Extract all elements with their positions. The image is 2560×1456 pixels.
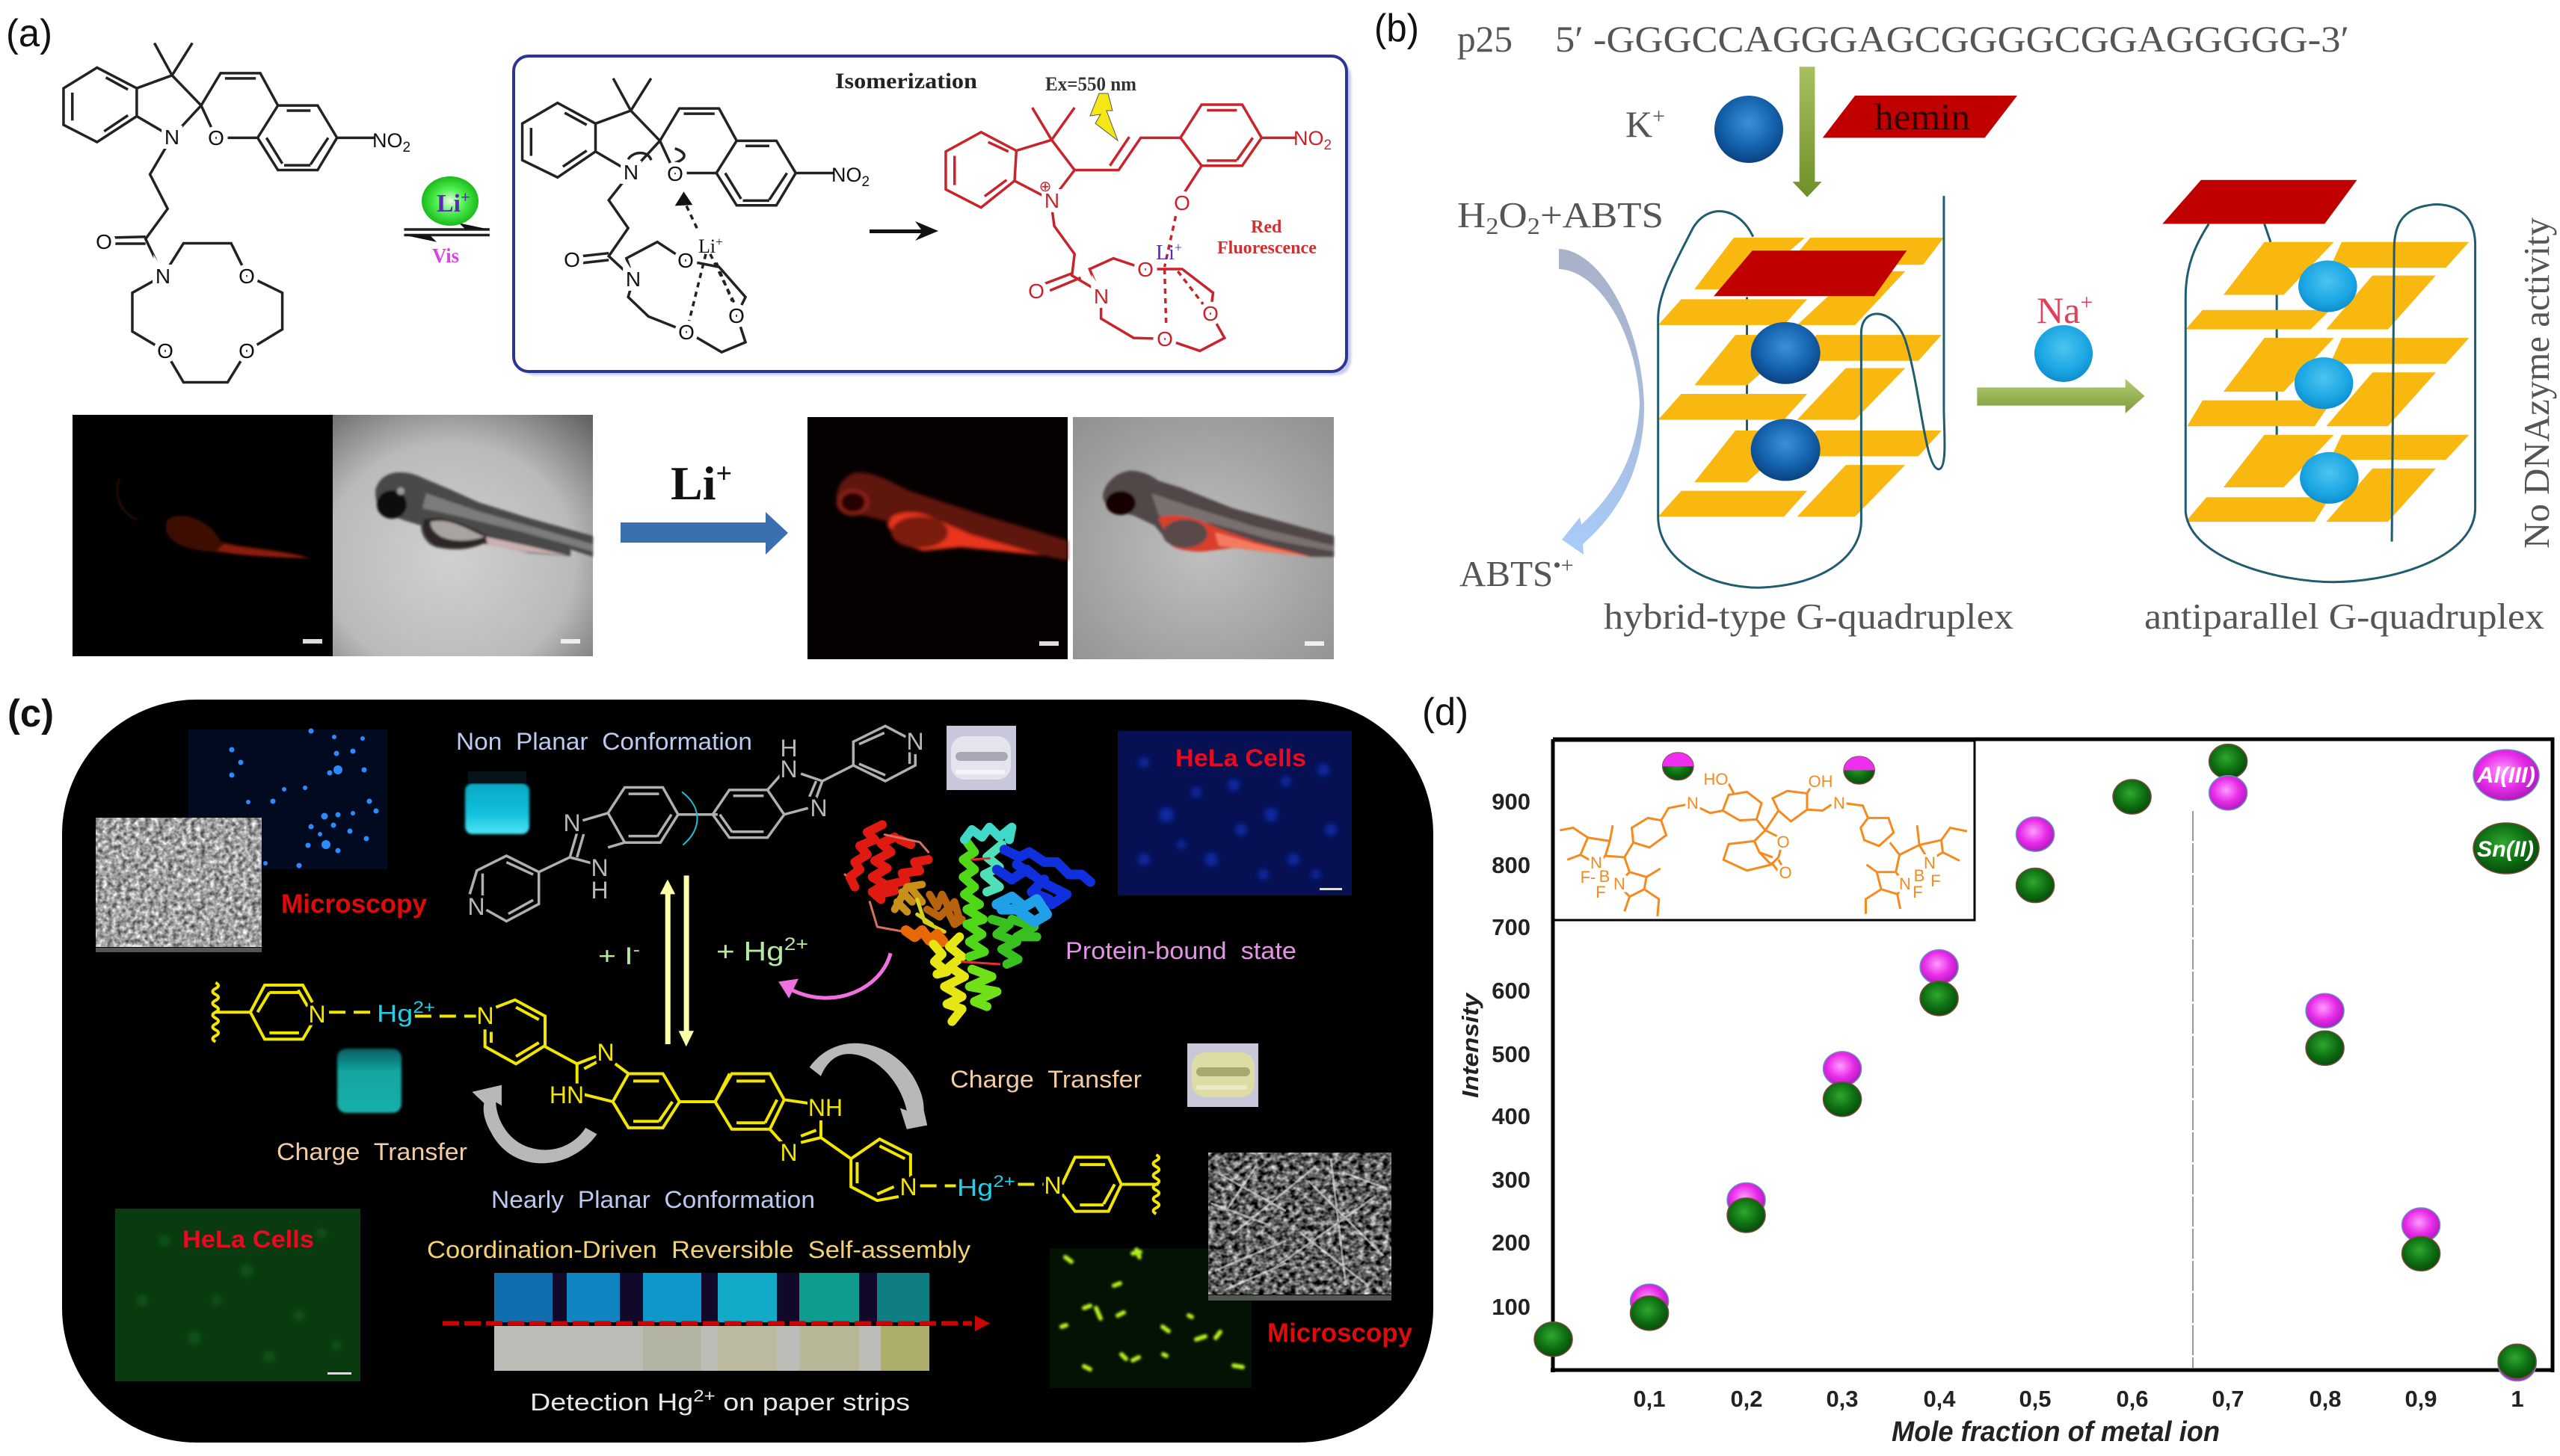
x axis tick labels — [1633, 1386, 2524, 1412]
image: paper strips — [494, 1273, 929, 1371]
molecule: black closed form: N — [626, 268, 641, 291]
arrow: gray left charge transfer — [472, 1085, 597, 1163]
x axis tick labels: 0,8 — [2309, 1386, 2342, 1412]
y axis tick labels: 600 — [1492, 978, 1530, 1004]
text: p25 sequence: p25 — [1457, 18, 1513, 60]
icon: yellow vial — [1187, 1043, 1258, 1107]
inset: BODIPY molecule: HO — [1703, 770, 1729, 789]
diagram: antiparallel G-quadruplex — [2162, 180, 2476, 582]
molecule: gray non planar: N — [591, 854, 609, 881]
inset: BODIPY molecule: N — [1924, 854, 1936, 872]
text: Charge Transfer right: Charge Transfer — [950, 1066, 1142, 1093]
icon: Na+ ball — [2034, 325, 2093, 382]
diagram: hybrid-type G-quadruplex — [1658, 196, 1945, 587]
inset: BODIPY molecule: N — [1687, 794, 1699, 812]
text: HeLa Cells: HeLa Cells — [182, 1226, 314, 1253]
molecule: black closed form: O — [667, 162, 683, 185]
text: H2O2+ABTS: H — [1457, 194, 1483, 235]
inset: BODIPY molecule: N — [1613, 874, 1625, 893]
text: Detection on paper strips: Detection Hg — [530, 1389, 668, 1416]
text: H2O2+ABTS: 2 — [1486, 212, 1498, 239]
scale bars — [303, 639, 322, 644]
equilibrium arrows with Li+ and Vis: + — [461, 188, 470, 206]
icon: Li+ ball — [422, 176, 479, 226]
molecule: gray non planar: N — [906, 728, 924, 755]
text: + Hg2+: + Hg — [716, 936, 774, 966]
molecule: red open form — [946, 105, 1332, 351]
molecule: red open form: ⊕ — [1039, 179, 1051, 195]
inset: BODIPY molecule: O — [1779, 863, 1792, 882]
y axis tick labels: 900 — [1492, 789, 1530, 815]
text: Li+: + — [716, 458, 732, 490]
image: HeLa blue — [1118, 731, 1352, 895]
inset: BODIPY molecule: B — [1599, 867, 1610, 886]
fish body — [375, 472, 593, 557]
molecule: yellow planar complex: N — [308, 1001, 326, 1028]
molecule: red open form: O — [1028, 280, 1044, 303]
arrow: gray right charge transfer — [810, 1043, 927, 1129]
text: H2O2+ABTS: 2 — [1527, 212, 1540, 239]
legend: Sn(II) — [2473, 823, 2539, 874]
x axis tick labels: 0,6 — [2116, 1386, 2149, 1412]
molecule: black closed form: N — [624, 161, 639, 184]
molecule: spiropyran crown ether: O — [96, 230, 112, 253]
image: SEM bottom-right — [1208, 1153, 1391, 1301]
text: Detection on paper strips: on paper strips — [716, 1389, 910, 1416]
arrow: isomerization — [870, 221, 938, 241]
legend: Al(III) — [2473, 750, 2539, 801]
legend: Sn(II): Sn(II) — [2477, 837, 2534, 862]
inset: BODIPY molecule: OH — [1808, 772, 1833, 791]
molecule: spiropyran crown ether: O — [157, 339, 173, 363]
inset half balls — [1663, 753, 1874, 784]
molecule: yellow planar complex: NH — [808, 1094, 843, 1121]
molecule: black closed form: O — [677, 249, 694, 272]
molecule: gray non planar: N — [810, 795, 828, 821]
molecule: spiropyran crown ether: N — [164, 126, 179, 149]
icon: lightning — [1090, 93, 1118, 141]
molecule: red open form: NO — [1293, 127, 1323, 149]
y axis tick labels: 800 — [1492, 852, 1530, 878]
inset: BODIPY molecule: N — [1590, 854, 1602, 872]
y axis tick labels: 100 — [1492, 1294, 1530, 1320]
inset: BODIPY molecule: N — [1833, 794, 1845, 812]
label (b): (b) — [1374, 7, 1419, 50]
panel: a — [6, 12, 1351, 659]
icon: hemin: hemin — [1874, 96, 1970, 138]
equilibrium arrows with Li+ and Vis — [404, 176, 490, 267]
label (c): (c) — [7, 692, 54, 735]
inset: BODIPY molecule — [1554, 741, 1975, 920]
molecule: red open form: + — [1175, 240, 1182, 255]
molecule: yellow planar complex: N — [899, 1173, 917, 1200]
text: HeLa Cells: HeLa Cells — [1175, 744, 1306, 771]
text: hybrid label: hybrid-type G-quadruplex — [1604, 596, 2013, 637]
equilibrium arrows with Li+ and Vis: Vis — [432, 244, 459, 267]
image: green microscopy — [1050, 1248, 1252, 1388]
image: blue microscopy — [188, 728, 387, 869]
molecule: yellow planar complex — [212, 983, 1159, 1214]
text: H2O2+ABTS: O — [1498, 194, 1527, 235]
panel: c — [7, 692, 1433, 1443]
inset: BODIPY molecule: B — [1914, 866, 1924, 885]
molecule: red open form: 2 — [1323, 138, 1332, 153]
molecule: gray non planar: N — [780, 756, 798, 783]
molecule: spiropyran crown ether: 2 — [402, 140, 410, 155]
arrow: red dashed — [443, 1315, 990, 1331]
molecule: spiropyran crown ether: NO — [372, 129, 402, 152]
molecule: black closed form — [523, 78, 870, 352]
molecule: spiropyran crown ether: O — [239, 339, 255, 363]
text: Hg2+ right: 2+ — [993, 1172, 1015, 1191]
text: red fluorescence: Red — [1251, 218, 1282, 237]
x axis tick labels: 0,9 — [2404, 1386, 2437, 1412]
text: Coordination-Driven Reversible Self-assembly: Coordination-Driven Reversible Self-assembly — [427, 1236, 970, 1263]
icon: cyan vial — [465, 771, 529, 834]
molecule: red open form: O — [1157, 327, 1173, 351]
y axis tick labels: 500 — [1492, 1041, 1530, 1067]
molecule: gray non planar — [467, 726, 924, 922]
arrow: pink curved — [778, 953, 890, 999]
equilibrium arrows with Li+ and Vis: Li — [437, 190, 461, 218]
x axis tick labels: 0,3 — [1826, 1386, 1859, 1412]
y axis tick labels — [1492, 789, 1530, 1320]
text: Na+: + — [2080, 290, 2093, 315]
y axis tick labels: 400 — [1492, 1103, 1530, 1129]
x axis tick labels: 1 — [2511, 1386, 2524, 1412]
inset: BODIPY molecule: N — [1899, 874, 1911, 893]
black rounded background — [62, 700, 1433, 1443]
x axis tick labels: 0,1 — [1633, 1386, 1666, 1412]
text: antiparallel label: antiparallel G-quadruplex — [2144, 596, 2544, 637]
text: H2O2+ABTS: +ABTS — [1540, 194, 1664, 235]
molecule: black closed form: O — [728, 304, 745, 327]
molecule: black closed form: O — [678, 321, 695, 344]
faint fluorescence — [117, 478, 310, 558]
text: Microscopy: Microscopy — [1267, 1318, 1413, 1348]
dashed stoichiometry line — [2192, 811, 2194, 1368]
molecule: spiropyran crown ether — [64, 43, 410, 382]
text: ABTS radical: •+ — [1553, 553, 1574, 578]
panel: d — [1422, 691, 2553, 1448]
text: Na+: Na — [2037, 289, 2080, 331]
text: Charge Transfer left: Charge Transfer — [277, 1138, 467, 1165]
text: excitation: Ex=550 nm — [1045, 73, 1136, 95]
panel: b — [1374, 7, 2557, 637]
text: K+: + — [1652, 104, 1665, 129]
text: Hg2+ left: 2+ — [413, 998, 435, 1017]
molecule: red open form: O — [1174, 191, 1190, 215]
image: HeLa green — [115, 1209, 360, 1381]
inset: BODIPY molecule: F — [1913, 883, 1923, 901]
legend: Al(III): Al(III) — [2476, 763, 2535, 788]
x axis tick labels: 0,7 — [2212, 1386, 2244, 1412]
text: Protein-bound state: Protein-bound state — [1065, 937, 1296, 964]
x axis tick labels: 0,5 — [2019, 1386, 2052, 1412]
icon: clear vial — [947, 726, 1016, 790]
text: Li+: Li — [671, 457, 716, 510]
arrow: lilac curved — [1559, 249, 1644, 555]
text: red fluorescence: Fluorescence — [1217, 238, 1317, 258]
molecule: red open form: N — [1044, 189, 1059, 212]
molecule: red open form: O — [1137, 258, 1154, 281]
image: zebrafish after Li+ — [807, 417, 1334, 659]
molecule: gray non planar: H — [780, 735, 798, 762]
molecule: yellow planar complex: N — [780, 1139, 798, 1166]
protein ribbon structure — [845, 824, 1090, 1022]
image: SEM top-left — [96, 818, 262, 952]
y axis tick labels: 200 — [1492, 1230, 1530, 1256]
inset: BODIPY molecule: F- — [1581, 868, 1596, 886]
molecule: red open form: Li — [1156, 241, 1175, 265]
text: Non Planar Conformation: Non Planar Conformation — [456, 728, 752, 755]
molecule: gray non planar: H — [591, 877, 609, 904]
text: + Hg2+: 2+ — [784, 934, 808, 954]
molecule: spiropyran crown ether: O — [208, 126, 224, 149]
molecule: yellow planar complex: HN — [550, 1082, 584, 1108]
axis frame — [1551, 739, 2553, 1372]
molecule: spiropyran crown ether: N — [156, 265, 170, 288]
text: Nearly Planar Conformation: Nearly Planar Conformation — [491, 1186, 815, 1213]
arrow: green vertical — [1792, 67, 1822, 197]
text: p25 sequence: 5′ -GGGCCAGGGAGCGGGGCGGAGGGGG-3′ — [1555, 18, 2349, 60]
molecule: yellow planar complex: N — [1044, 1172, 1062, 1199]
molecule: black closed form: O — [564, 248, 580, 271]
y axis tick labels: 700 — [1492, 914, 1530, 940]
icon: K+ ball — [1714, 96, 1783, 163]
text: Microscopy: Microscopy — [281, 889, 428, 919]
data points: Al(III) — [1631, 817, 2536, 1381]
x axis tick labels: 0,4 — [1923, 1386, 1956, 1412]
y axis title: Intensity — [1457, 992, 1483, 1098]
data points: Sn(II) — [1534, 744, 2536, 1378]
arrow: blue Li+ — [621, 512, 788, 555]
molecule: spiropyran crown ether: O — [239, 265, 255, 288]
label (d): (d) — [1422, 691, 1468, 734]
text: Hg2+ left: Hg — [377, 1000, 407, 1027]
molecule: black closed form: Li — [698, 235, 716, 257]
molecule: yellow planar complex: N — [476, 1002, 494, 1029]
fish overlay — [1103, 471, 1334, 557]
text: K+: K — [1625, 103, 1652, 145]
text: No DNAzyme activity: No DNAzyme activity — [2516, 218, 2557, 549]
scale bars — [1039, 641, 1059, 646]
molecule: black closed form: 2 — [861, 174, 870, 190]
image: zebrafish before Li+ — [73, 415, 593, 656]
x axis tick labels: 0,2 — [1730, 1386, 1763, 1412]
x axis title: Mole fraction of metal ion — [1892, 1416, 2220, 1448]
molecule: red open form: O — [1202, 302, 1219, 325]
text: + I-: - — [633, 940, 640, 959]
text: Hg2+ right: Hg — [957, 1174, 988, 1201]
molecule: gray non planar: N — [467, 893, 485, 920]
text: Detection on paper strips: 2+ — [693, 1386, 716, 1405]
text: + I-: + I — [598, 943, 625, 969]
isomerization box — [514, 56, 1351, 375]
icon: hemin — [1823, 96, 2017, 138]
text: ABTS radical: ABTS — [1459, 553, 1553, 594]
molecule: black closed form: NO — [831, 164, 861, 186]
y axis tick labels: 300 — [1492, 1167, 1530, 1193]
title: Isomerization: Isomerization — [835, 69, 977, 93]
inset: BODIPY molecule: O — [1776, 833, 1790, 851]
molecule: gray non planar: N — [563, 809, 581, 836]
fish fluorescence — [837, 472, 1068, 561]
inset: BODIPY molecule: F — [1596, 883, 1606, 901]
molecule: black closed form: + — [716, 235, 723, 249]
icon: teal vial — [337, 1049, 401, 1113]
label (a): (a) — [6, 12, 52, 55]
molecule: yellow planar complex: N — [597, 1039, 615, 1066]
arrow: green horizontal — [1977, 379, 2144, 413]
equilibrium arrows — [660, 875, 694, 1046]
inset: BODIPY molecule: F — [1930, 872, 1941, 890]
molecule: red open form: N — [1094, 285, 1109, 308]
